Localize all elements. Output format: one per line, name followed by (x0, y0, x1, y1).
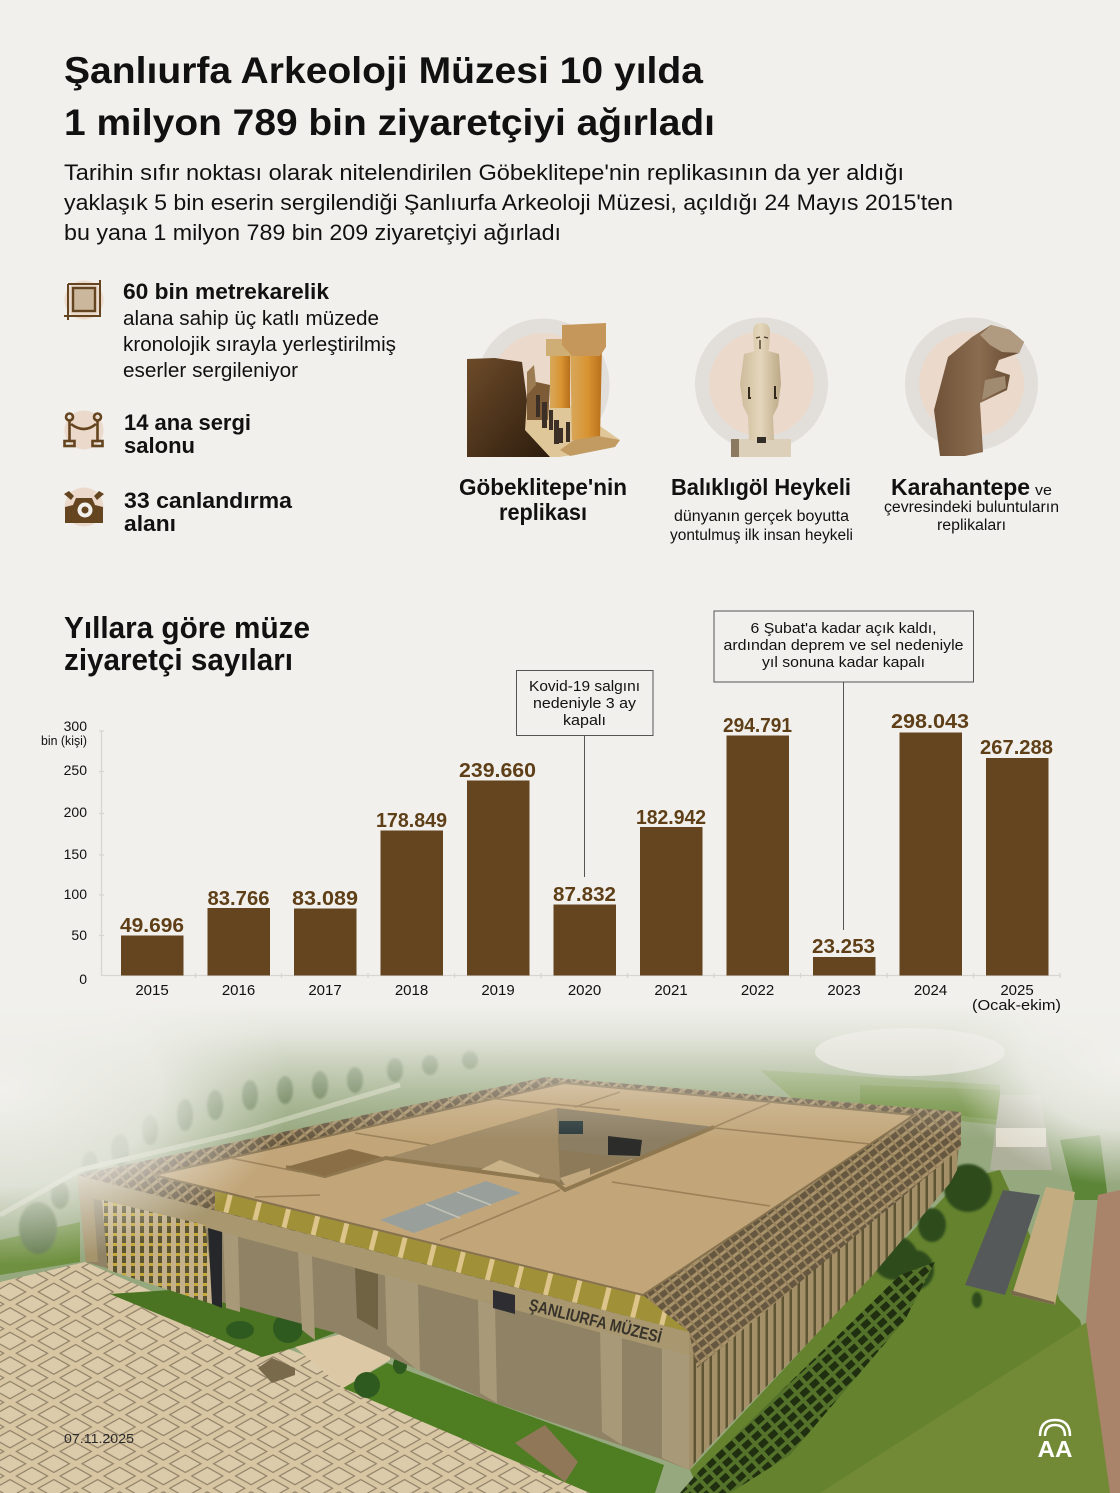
fact: area: 60 bin metrekarelik (123, 279, 329, 304)
roof seams (230, 1092, 870, 1240)
values: 87.832 (553, 884, 616, 906)
chart heading: Yıllara göre müze (64, 610, 310, 645)
plaza garden strips (110, 1290, 343, 1357)
exhibit: Balıklıgöl statue: dünyanın gerçek boyutta (674, 508, 849, 525)
exhibit: Karahantepe (884, 318, 1059, 534)
intro text: yaklaşık 5 bin eserin sergilendiği Şanlıurfa Arkeoloji Müzesi, açıldığı 24 Mayıs 2015'ten (64, 190, 953, 215)
values: 83.766 (208, 888, 270, 910)
intro text (64, 160, 953, 245)
parking lot (965, 1190, 1040, 1295)
values: 83.089 (292, 888, 358, 910)
sign on facade (493, 1290, 664, 1347)
year labels: 2015 (135, 982, 169, 999)
y axis: bin (kişi) (41, 734, 87, 748)
year labels: 2020 (568, 982, 601, 999)
exhibit: Karahantepe: replikaları (937, 517, 1006, 534)
callout: 2020 covid: kapalı (563, 713, 606, 729)
fact: area: alana sahip üç katlı müzede (123, 308, 379, 330)
year labels: 2016 (222, 982, 255, 999)
photo: statue (695, 318, 828, 457)
plaza paving (0, 1262, 600, 1493)
fact: halls: salonu (124, 433, 195, 458)
fact: area: eserler sergileniyor (123, 360, 298, 382)
year labels: 2025 (1000, 982, 1034, 999)
y axis: 300 (64, 718, 87, 734)
exhibit: Karahantepe: ve (1035, 482, 1052, 499)
values: 267.288 (980, 737, 1053, 759)
bar chart (41, 711, 1061, 1014)
right side buildings (990, 1095, 1052, 1170)
title: 1 milyon 789 bin ziyaretçiyi ağırladı (64, 102, 715, 143)
callout: 2020 covid (516, 670, 653, 877)
values: 182.942 (636, 807, 706, 829)
year labels: 2021 (654, 982, 688, 999)
small roof void (286, 1149, 382, 1176)
year labels: (Ocak-ekim) (972, 997, 1061, 1014)
roof surface (154, 1083, 914, 1295)
values: 294.791 (723, 715, 792, 737)
exhibit: Balıklıgöl statue (670, 318, 853, 544)
exhibit: Karahantepe: çevresindeki buluntuların (884, 499, 1059, 516)
logo: AA (1038, 1420, 1072, 1462)
right facade (689, 1112, 961, 1470)
icon: floor area (64, 280, 104, 320)
roof slat band (77, 1077, 961, 1332)
icon: diorama stage (64, 488, 104, 526)
callout: 2020 covid: Kovid-19 salgını (529, 679, 640, 695)
callout: 2023 earthquake: ardından deprem ve sel nedeniyle (724, 638, 964, 654)
fact: animation areas (64, 488, 292, 536)
photo: carved animal (905, 318, 1038, 456)
fact: halls (64, 410, 251, 458)
photo: Göbeklitepe pillars (467, 318, 620, 457)
bars (121, 732, 1048, 976)
y axis: 200 (64, 804, 87, 820)
logo: AA: AA (1038, 1436, 1072, 1462)
exhibit: Göbeklitepe replica (459, 318, 627, 525)
arena in distance (815, 1028, 1005, 1076)
skylight (380, 1181, 521, 1233)
title (64, 50, 715, 143)
callout: 2023 earthquake: yıl sonuna kadar kapalı (762, 655, 925, 671)
y axis: 150 (64, 846, 87, 862)
exhibit: Balıklıgöl statue: yontulmuş ilk insan heykeli (670, 527, 853, 544)
year labels: 2022 (741, 982, 774, 999)
exhibit: Karahantepe: Karahantepe (891, 474, 1030, 500)
callout: 2020 covid: nedeniyle 3 ay (533, 696, 637, 712)
y axis: 0 (79, 971, 87, 987)
year labels: 2019 (481, 982, 515, 999)
exhibit: Göbeklitepe replica: Göbeklitepe'nin (459, 474, 627, 500)
callout: 2023 earthquake (714, 611, 974, 930)
intro text: Tarihin sıfır noktası olarak nitelendirilen Göbeklitepe'nin replikasının da yer aldığı (64, 160, 904, 185)
y axis: 250 (64, 762, 87, 778)
y axis: 100 (64, 886, 87, 902)
year labels (135, 982, 1061, 1014)
chart heading (64, 610, 310, 677)
sign on facade: ŞANLIURFA MÜZESİ (527, 1295, 664, 1347)
road strip (1086, 1190, 1120, 1493)
fact: animation areas: 33 canlandırma (124, 488, 292, 513)
fact: animation areas: alanı (124, 511, 176, 536)
trees right (872, 1164, 992, 1308)
exhibit: Balıklıgöl statue: Balıklıgöl Heykeli (671, 474, 851, 500)
callout: 2023 earthquake: 6 Şubat'a kadar açık kaldı, (750, 621, 936, 637)
facade piers (77, 1175, 98, 1262)
year labels: 2023 (827, 982, 861, 999)
values (120, 711, 1053, 958)
title: Şanlıurfa Arkeoloji Müzesi 10 yılda (64, 50, 703, 91)
museum aerial photo (0, 1005, 1120, 1493)
right lawn (690, 1170, 1110, 1493)
fact: area: kronolojik sırayla yerleştirilmiş (123, 334, 396, 356)
values: 23.253 (812, 936, 875, 958)
y axis (41, 718, 1060, 987)
fact: area (64, 279, 396, 382)
values: 298.043 (891, 711, 969, 733)
side long building (1012, 1187, 1075, 1305)
icon: rope barrier (64, 410, 104, 450)
values: 49.696 (120, 915, 184, 937)
intro text: bu yana 1 milyon 789 bin 209 ziyaretçiyi ağırladı (64, 220, 561, 245)
white fade top (0, 1005, 1120, 1140)
values: 178.849 (376, 810, 447, 832)
year labels: 2017 (308, 982, 342, 999)
park trees (19, 1051, 478, 1254)
values: 239.660 (459, 760, 536, 782)
date: 07.11.2025 (64, 1431, 134, 1446)
year labels: 2024 (914, 982, 947, 999)
facade shadow on grass (680, 1262, 935, 1493)
year labels: 2018 (395, 982, 428, 999)
left facade (77, 1175, 689, 1470)
chart heading: ziyaretçi sayıları (64, 642, 293, 677)
exhibit: Göbeklitepe replica: replikası (499, 499, 587, 525)
surrounding park (0, 1005, 1120, 1493)
courtyard (386, 1108, 714, 1185)
fact: halls: 14 ana sergi (124, 410, 251, 435)
y axis: 50 (71, 927, 87, 943)
